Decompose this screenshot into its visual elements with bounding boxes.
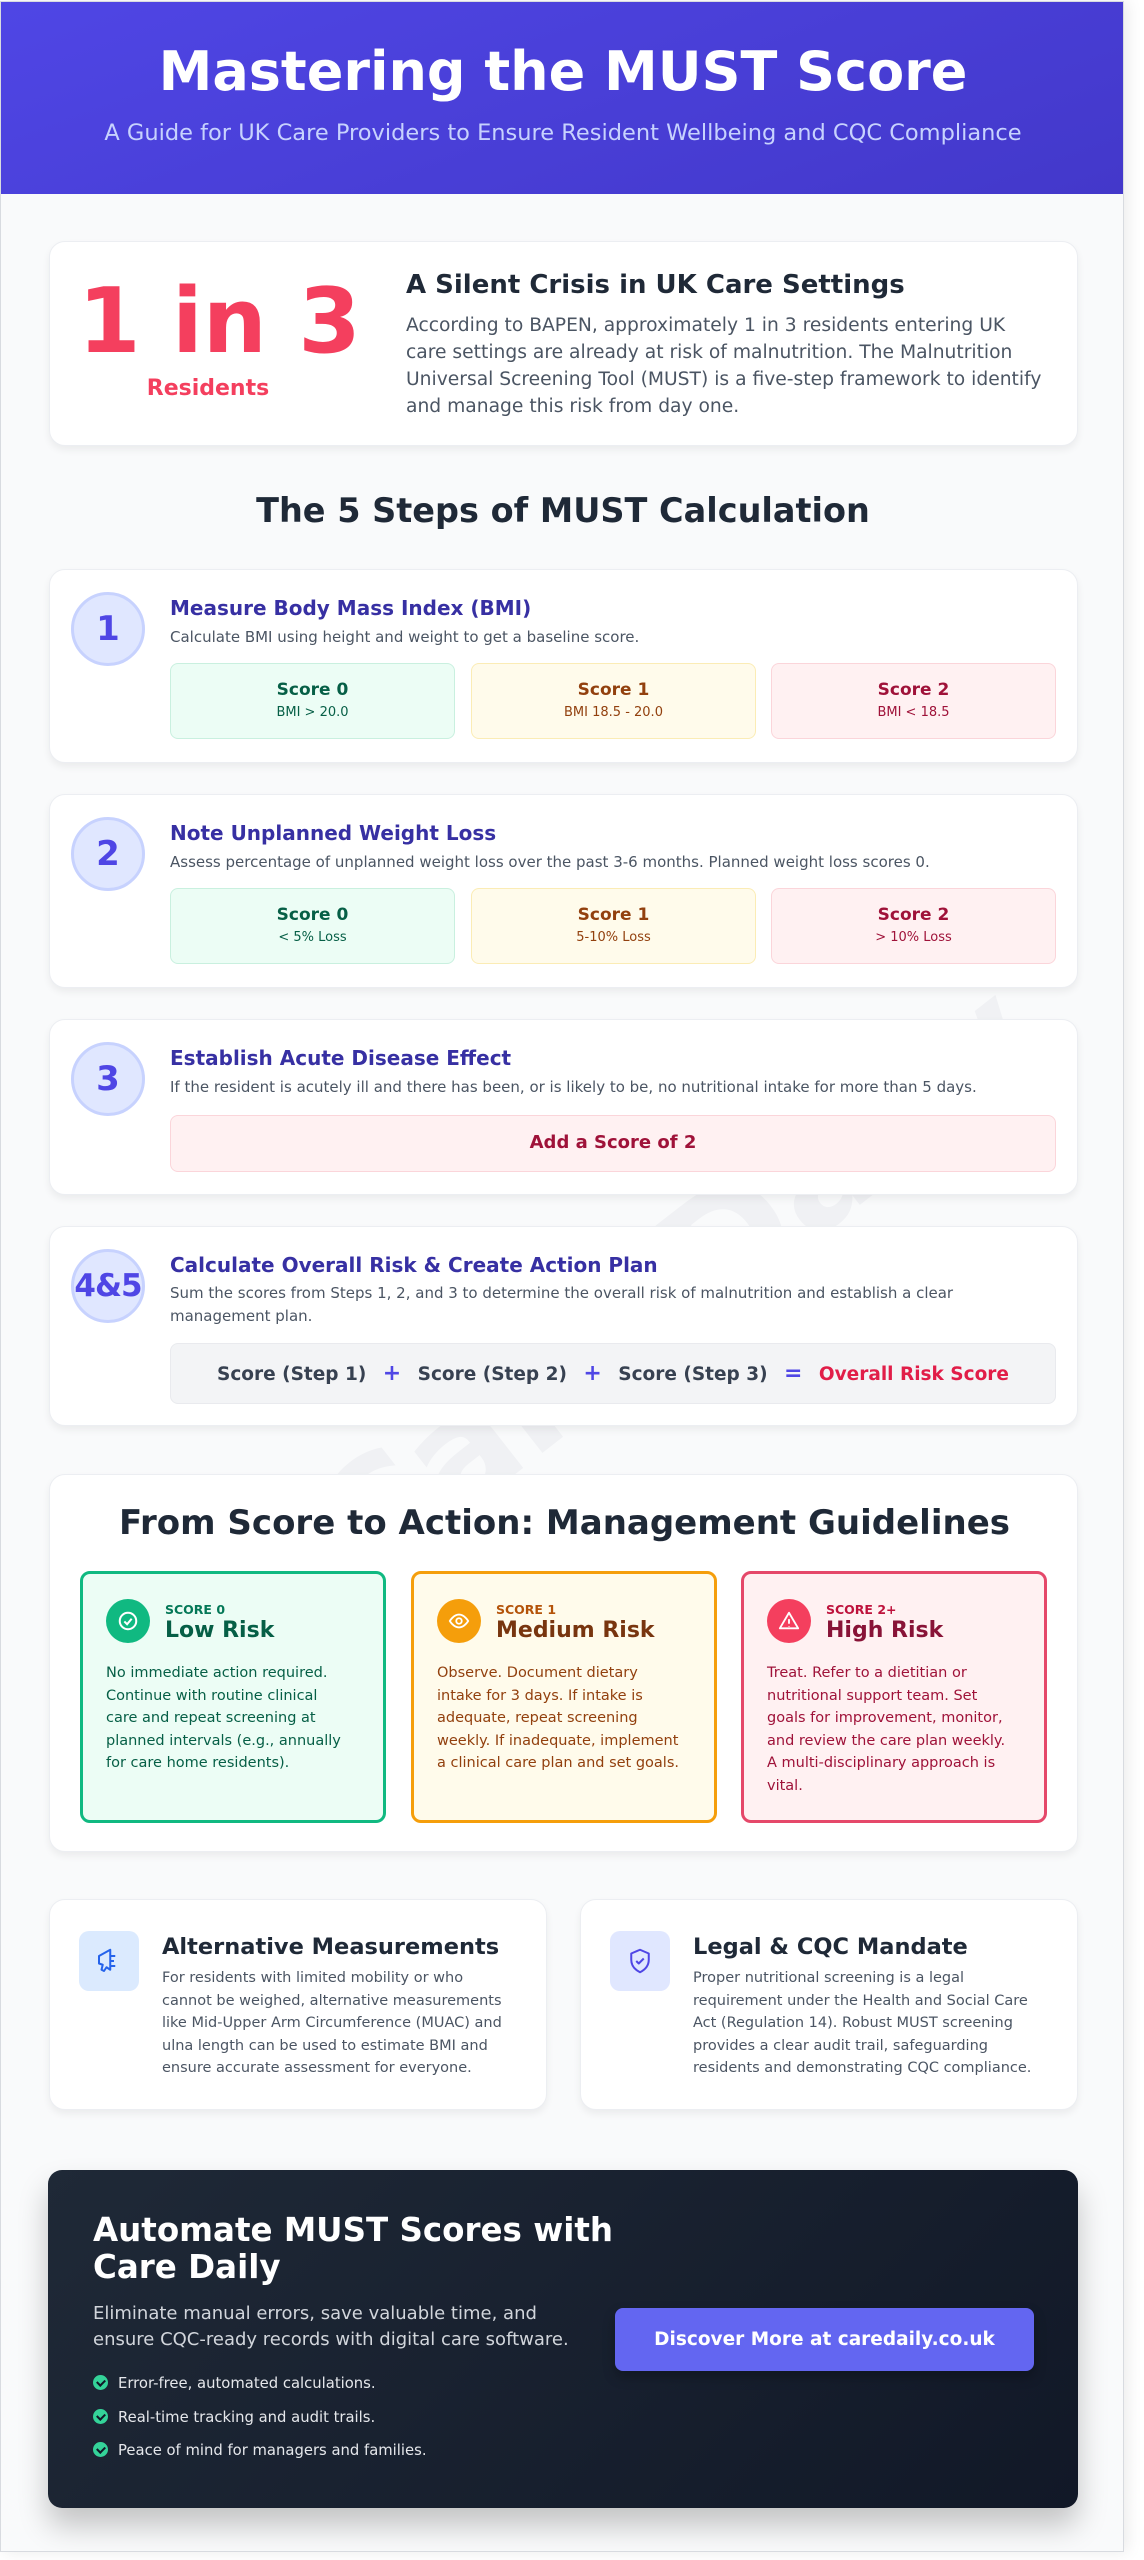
score box 2 [771,663,1056,739]
score box 2: BMI < 18.5 [877,705,950,720]
step number 1: 1 [96,609,120,649]
panel: legal & CQC: Proper nutritional screening is a legal requirement under the Health and Social Care Act (Regulation 14). Robust MUST screening provides a clear audit trail, safeguarding residents and demonstrating CQC compliance. [693,1970,1031,2076]
step number 3 [71,1042,145,1116]
CTA panel [48,2170,1078,2508]
score box 2 [771,888,1056,964]
CTA bullets: Peace of mind for managers and families. [118,2442,427,2459]
step 2 description: Assess percentage of unplanned weight loss over the past 3-6 months. Planned weight loss scores 0. [170,853,930,871]
score box 1: BMI 18.5 - 20.0 [564,705,663,720]
stat number: Residents [147,376,269,401]
icon: shield [610,1931,670,1991]
CTA button: Discover More at caredaily.co.uk [654,2329,995,2350]
icon: check [106,1599,150,1643]
step 4&5 description: Sum the scores from Steps 1, 2, and 3 to determine the overall risk of malnutrition and establish a clear management plan. [170,1284,953,1325]
score box 1 [471,663,756,739]
formula box [170,1343,1056,1404]
CTA title: Automate MUST Scores with Care Daily [93,2211,613,2286]
icon: warning [767,1599,811,1643]
step number 3: 3 [96,1059,120,1099]
formula box: Score (Step 1) + Score (Step 2) + Score (Step 3) = Overall Risk Score [217,1361,1009,1386]
step 4&5 title: Calculate Overall Risk & Create Action Plan [170,1253,658,1277]
step 3 card [49,1019,1078,1195]
header banner [1,2,1125,194]
high risk card: High Risk [826,1618,943,1643]
step number 2 [71,817,145,891]
low risk card: SCORE 0 [165,1602,225,1617]
step number 4&5: 4&5 [74,1268,142,1304]
score box 1: Score 1 [578,680,649,700]
score box 2: Score 2 [878,680,949,700]
add score box [170,1115,1056,1172]
add score box: Add a Score of 2 [530,1132,696,1153]
step 4&5 card [49,1226,1078,1426]
watermark: Care Daily [281,949,1070,1619]
steps heading: The 5 Steps of MUST Calculation [256,491,870,530]
title: Mastering the MUST Score [159,40,967,103]
score box 1: Score 1 [578,905,649,925]
CTA bullets [93,2375,427,2459]
panel: legal & CQC: Legal & CQC Mandate [693,1934,968,1960]
step 1 title: Measure Body Mass Index (BMI) [170,596,531,620]
low risk card [80,1571,386,1823]
step 1 card [49,569,1078,763]
stat card: silent crisis [49,241,1078,446]
step 3 description: If the resident is acutely ill and there has been, or is likely to be, no nutritional intake for more than 5 days. [170,1078,977,1096]
score box 1: 5-10% Loss [576,930,651,945]
crisis text: According to BAPEN, approximately 1 in 3 residents entering UK care settings are already at risk of malnutrition. The Malnutrition Universal Screening Tool (MUST) is a five-step framework to identify and manage this risk from day one. [406,315,1041,417]
score box 0: Score 0 [277,905,348,925]
management heading: From Score to Action: Management Guidelines [119,1503,1010,1543]
step 3 title: Establish Acute Disease Effect [170,1046,511,1070]
score box 0: Score 0 [277,680,348,700]
CTA button [615,2308,1034,2371]
medium risk card: Observe. Document dietary intake for 3 days. If intake is adequate, repeat screening weekly. If inadequate, implement a clinical care plan and set goals. [437,1665,679,1771]
CTA bullets: Real-time tracking and audit trails. [118,2408,375,2426]
CTA text: Eliminate manual errors, save valuable time, and ensure CQC-ready records with digital care software. [93,2303,569,2350]
panel: legal & CQC [580,1899,1078,2110]
medium risk card [411,1571,717,1823]
icon: measurement [79,1931,139,1991]
high risk card: Treat. Refer to a dietitian or nutritional support team. Set goals for improvement, monitor, and review the care plan weekly. A multi-disciplinary approach is vital. [767,1665,1005,1794]
medium risk card: SCORE 1 [496,1602,556,1617]
panel: management guidelines [49,1474,1078,1852]
step 1 description: Calculate BMI using height and weight to get a baseline score. [170,628,639,646]
subtitle: A Guide for UK Care Providers to Ensure Resident Wellbeing and CQC Compliance [104,120,1022,146]
score box 0 [170,888,455,964]
step 2 title: Note Unplanned Weight Loss [170,821,496,845]
medium risk card: Medium Risk [496,1618,655,1643]
score box 0 [170,663,455,739]
high risk card [741,1571,1047,1823]
panel: alternative measurements: For residents with limited mobility or who cannot be weighed, alternative measurements like Mid-Upper Arm Circumference (MUAC) and ulna length can be used to estimate BMI and ensure accurate assessment for everyone. [162,1970,502,2076]
stat number: 1 in 3 [78,269,361,374]
score box 2: Score 2 [878,905,949,925]
step number 1 [71,592,145,666]
CTA bullets: Error-free, automated calculations. [118,2375,376,2392]
score box 0: BMI > 20.0 [276,705,349,720]
score box 2: > 10% Loss [875,930,952,945]
step number 4&5 [71,1249,145,1323]
crisis heading: A Silent Crisis in UK Care Settings [406,270,905,300]
panel: alternative measurements: Alternative Measurements [162,1934,499,1960]
step number 2: 2 [96,834,120,874]
step 2 card [49,794,1078,988]
low risk card: No immediate action required. Continue with routine clinical care and repeat screening at planned intervals (e.g., annually for care home residents). [106,1665,341,1771]
score box 0: < 5% Loss [278,930,347,945]
score box 1 [471,888,756,964]
high risk card: SCORE 2+ [826,1602,896,1617]
panel: alternative measurements [49,1899,547,2110]
icon: eye [437,1599,481,1643]
low risk card: Low Risk [165,1618,274,1643]
